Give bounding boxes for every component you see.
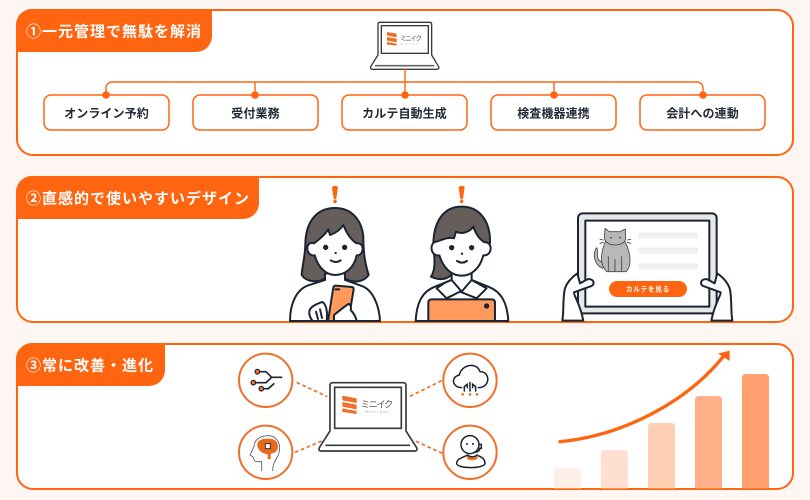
panel frame: [17, 10, 793, 155]
icon: laptop with logo: [371, 22, 439, 69]
icon: cloud: [443, 354, 497, 407]
collar: [437, 280, 487, 298]
dashed links: [295, 381, 442, 453]
box: online booking: [44, 95, 169, 130]
phone: [328, 286, 354, 321]
panel: continuous evolution: [16, 343, 793, 489]
box: online booking: オンライン予約: [64, 106, 149, 120]
heading tab: [16, 343, 165, 386]
box: reception: [193, 95, 318, 130]
heading tab: [16, 176, 259, 219]
icon: data flow: [239, 354, 292, 407]
box: chart generation: カルテ自動生成: [362, 106, 447, 120]
exclamation mark: [332, 186, 338, 203]
cat: [594, 228, 631, 272]
box: test equipment: [491, 95, 616, 130]
hands: [562, 273, 594, 321]
panel frame: [17, 177, 793, 322]
box: accounting: 会計への連動: [666, 106, 739, 120]
tablet body: [578, 213, 717, 313]
illustration: woman with tablet: [416, 186, 508, 321]
illustration: hands holding tablet with cat chart: [562, 213, 732, 321]
panel: unified management: [16, 9, 793, 155]
icon: laptop with logo: ミニイク: [361, 400, 393, 410]
heading tab: [16, 9, 212, 52]
icon: laptop with logo: Miniique: [401, 43, 421, 45]
connector tree: [102, 69, 707, 99]
panel frame: [17, 344, 793, 489]
icon: laptop with logo: Miniique: [366, 410, 388, 414]
tablet: [428, 299, 495, 321]
heading tab: ①一元管理で無駄を解消: [26, 22, 202, 40]
chart lines: [638, 232, 698, 238]
icon: support agent: [443, 426, 497, 479]
box: accounting: [640, 95, 765, 130]
icon: laptop with logo: ミニイク: [400, 34, 422, 42]
illustration: woman with phone: [290, 186, 380, 321]
icon: AI brain: [239, 426, 292, 479]
heading tab: ②直感的で使いやすいデザイン: [26, 190, 250, 208]
illustration: hands holding tablet with cat chart: カルテを見る: [626, 286, 670, 294]
exclamation mark: [459, 186, 465, 203]
panel: intuitive design: [16, 176, 793, 322]
box: test equipment: 検査機器連携: [517, 106, 590, 120]
icon: laptop with logo: [319, 383, 417, 451]
button: [609, 281, 687, 297]
heading tab: ③常に改善・進化: [26, 356, 154, 374]
bar chart: [554, 374, 769, 488]
box: chart generation: [342, 95, 467, 130]
box: reception: 受付業務: [231, 106, 280, 120]
growth arrow: [560, 351, 730, 442]
